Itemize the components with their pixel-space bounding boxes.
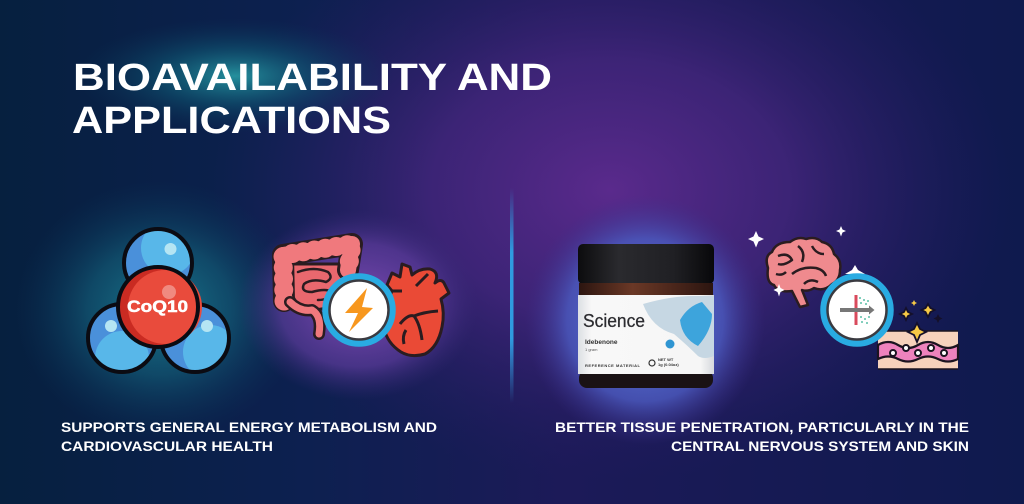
icon: skin section <box>878 331 958 369</box>
product jar <box>578 244 714 388</box>
label: CoQ10: CoQ10 <box>127 297 188 316</box>
title: BIOAVAILABILITY AND <box>73 57 552 99</box>
title <box>72 57 552 142</box>
right blue atom <box>160 302 231 374</box>
red center atom <box>118 267 202 347</box>
left blue atom <box>88 304 156 385</box>
icon: CoQ10 molecule <box>86 227 231 374</box>
caption: left: CARDIOVASCULAR HEALTH <box>61 439 273 454</box>
brand name: Science <box>583 311 645 331</box>
icon: penetration badge <box>824 276 890 344</box>
icon: sparkles <box>748 226 865 296</box>
net weight icon <box>649 360 655 366</box>
lower bowel <box>290 302 320 334</box>
caption: right: BETTER TISSUE PENETRATION, PARTICULARLY IN THE <box>555 420 969 435</box>
label artwork <box>643 296 714 358</box>
amber glass <box>579 283 713 296</box>
product name: Idebenone <box>585 339 618 346</box>
icon: gold stars <box>900 300 942 342</box>
net weight: 1g (0.04oz) <box>658 362 679 367</box>
colon <box>283 244 352 301</box>
reference text: REFERENCE MATERIAL <box>585 363 641 368</box>
title: APPLICATIONS <box>72 100 391 142</box>
quantity: 1 gram <box>585 347 598 352</box>
caption: right <box>555 420 969 454</box>
caption: left <box>61 420 437 454</box>
top blue atom <box>122 227 194 280</box>
icon: brain <box>767 238 840 307</box>
center divider <box>510 188 514 403</box>
jar lid <box>578 244 714 284</box>
net weight: NET WT <box>658 357 673 362</box>
caption: left: SUPPORTS GENERAL ENERGY METABOLISM AND <box>61 420 437 435</box>
icon: energy badge <box>326 276 392 344</box>
icon: heart <box>384 264 449 356</box>
small intestine <box>290 264 346 312</box>
icon: intestines <box>283 244 352 334</box>
jar label <box>578 295 714 374</box>
caption: right: CENTRAL NERVOUS SYSTEM AND SKIN <box>671 439 969 454</box>
